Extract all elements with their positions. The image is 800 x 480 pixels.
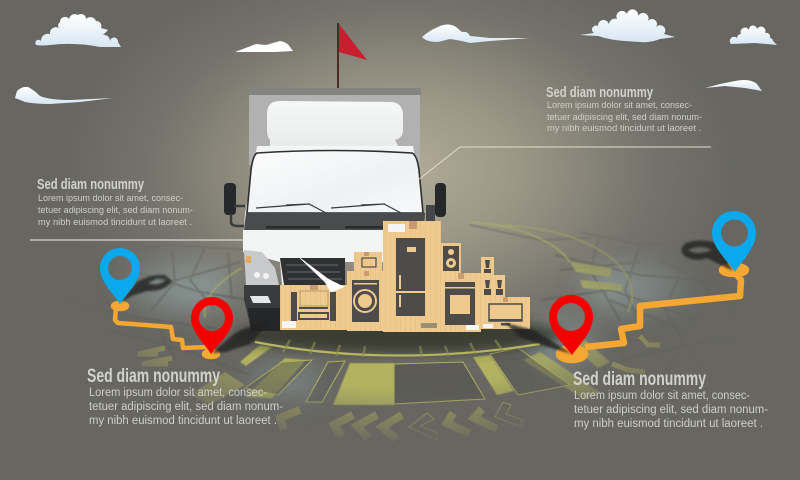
text block: bottom left: Lorem ipsum dolor sit amet, consec-	[89, 387, 267, 399]
text block: bottom right: Lorem ipsum dolor sit amet, consec-	[574, 390, 750, 402]
cloud 4	[422, 24, 530, 43]
callout line: top left	[30, 239, 245, 241]
text block: bottom left: Sed diam nonummy	[87, 366, 220, 387]
text block: bottom left: my nibh euismod tincidunt ut laoreet .	[89, 415, 277, 427]
text block: top left: my nibh euismod tincidunt ut laoreet .	[38, 217, 192, 227]
callout line: top right	[418, 147, 711, 180]
box: television	[481, 297, 530, 329]
cargo box	[249, 88, 421, 165]
text block: bottom left	[87, 366, 283, 427]
text block: bottom right	[573, 369, 768, 430]
text block: top left: Sed diam nonummy	[37, 176, 144, 193]
cloud 7	[705, 80, 762, 91]
flag on pole	[337, 23, 367, 88]
text block: top right: Lorem ipsum dolor sit amet, consec-	[547, 100, 692, 110]
mirrors	[224, 183, 446, 226]
pin: red left	[191, 297, 233, 354]
box: home theatre	[280, 285, 347, 330]
box: blenders	[481, 257, 505, 297]
ring segments	[190, 262, 622, 405]
chevrons	[138, 336, 660, 439]
box: laptop	[354, 252, 382, 271]
text block: top right	[546, 84, 702, 133]
ring segment outlines	[245, 348, 570, 404]
city map ground with radar rings	[128, 221, 687, 440]
text block: top right: Sed diam nonummy	[546, 84, 653, 101]
box: washing machine	[347, 271, 383, 331]
cloud 6	[730, 25, 777, 45]
box: oven	[441, 273, 481, 332]
callout line: grille pointer	[300, 258, 344, 292]
cloud 1	[35, 14, 121, 47]
hood	[243, 230, 390, 285]
cardboard boxes with appliances	[280, 221, 530, 332]
cab	[243, 146, 426, 240]
delivery truck	[224, 88, 446, 331]
grille	[280, 258, 345, 285]
radar rings	[203, 221, 634, 318]
cloud 2	[235, 41, 293, 52]
text block: bottom left: tetuer adipiscing elit, sed diam nonum-	[89, 401, 283, 413]
windshield	[247, 150, 423, 213]
outlined chevrons	[409, 402, 522, 440]
dashboard band	[244, 213, 425, 230]
pin: blue right	[712, 211, 756, 272]
pin: blue left	[100, 248, 140, 304]
wipers	[256, 204, 403, 214]
headlight	[244, 250, 279, 285]
box: speaker	[441, 243, 461, 273]
cloud 5	[580, 9, 675, 42]
text block: top right: tetuer adipiscing elit, sed diam nonum-	[547, 112, 702, 122]
roof spoiler	[267, 101, 403, 146]
bumper	[244, 285, 281, 331]
cloud 3	[15, 87, 113, 104]
text block: top right: my nibh euismod tincidunt ut laoreet .	[547, 123, 701, 133]
dark shadow under truck	[235, 317, 565, 357]
text block: bottom right: my nibh euismod tincidunt ut laoreet .	[574, 418, 763, 430]
map roads	[140, 224, 678, 375]
box: refrigerator	[383, 221, 441, 332]
route: right	[559, 266, 746, 360]
text block: bottom right: tetuer adipiscing elit, sed diam nonum-	[574, 404, 768, 416]
pin shadows	[120, 240, 733, 354]
text block: top left: tetuer adipiscing elit, sed diam nonum-	[38, 205, 193, 215]
route: left	[113, 303, 218, 357]
text block: bottom right: Sed diam nonummy	[573, 369, 706, 390]
text block: top left	[37, 176, 193, 227]
text block: top left: Lorem ipsum dolor sit amet, consec-	[38, 193, 183, 203]
pin: red right	[549, 295, 593, 355]
blue map glow	[120, 259, 695, 401]
